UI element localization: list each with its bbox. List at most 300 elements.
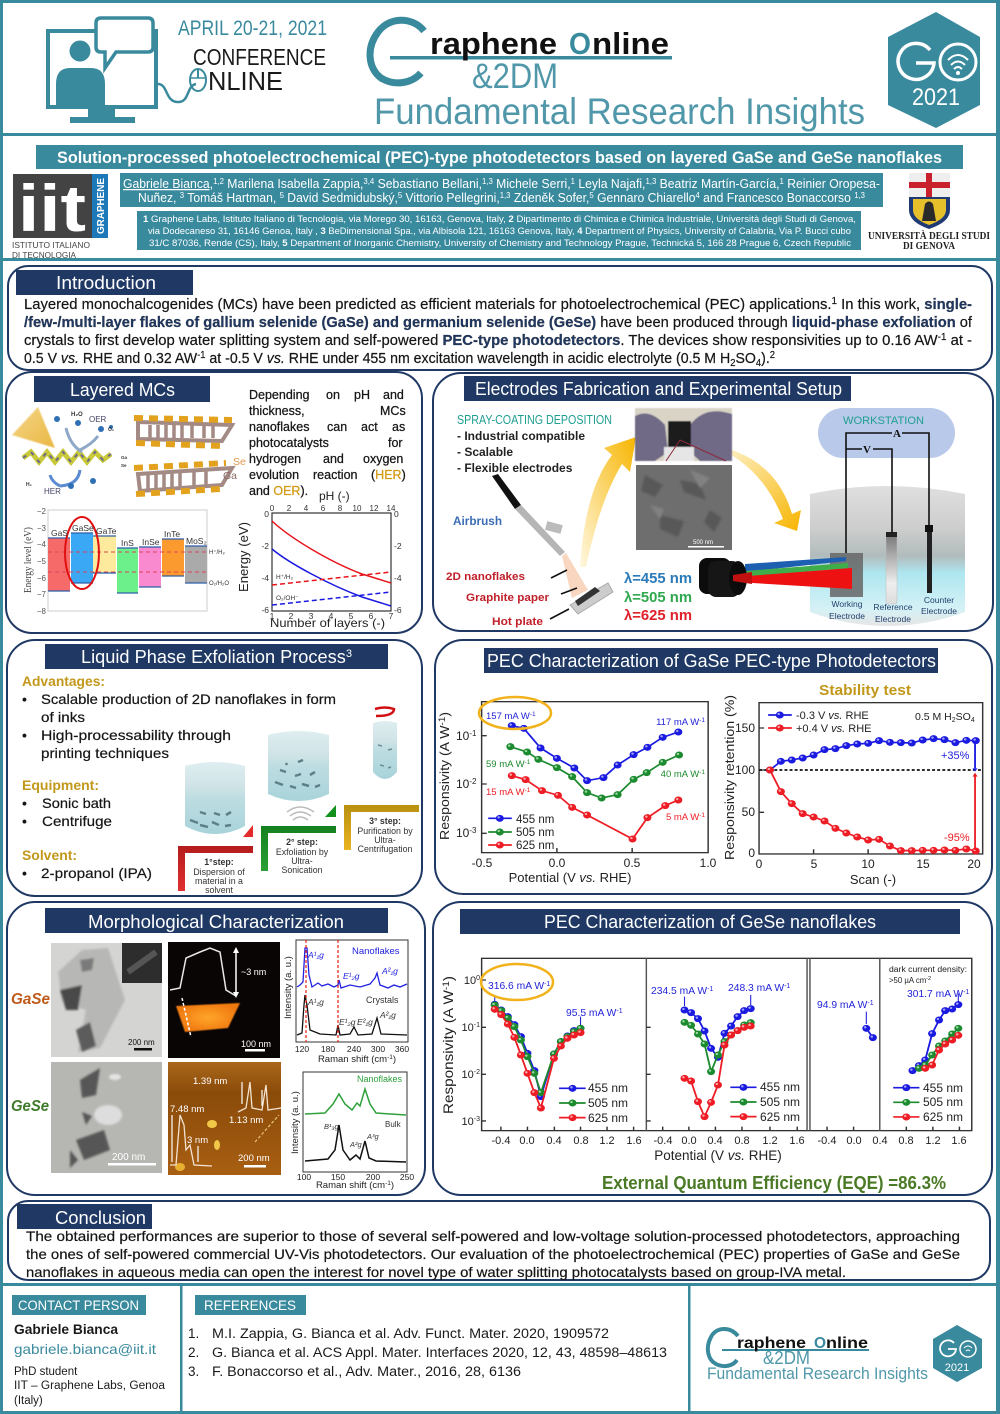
illustration: vial step 3 [373,708,397,779]
image: AFM GaSe: ~3 nm [241,967,266,977]
image: AFM GeSe: 1.39 nm [193,1076,227,1087]
chart: GeSe responsivity: 455 nm [760,1080,800,1094]
references block: G. Bianca et al. ACS Appl. Mater. Interfaces 2020, 12, 43, 48598–48613 [212,1345,667,1360]
chart: GeSe responsivity: Potential (V vs. RHE) [654,1148,782,1163]
photo: SEM image [636,465,732,550]
chart: stability test: 150 [735,721,755,735]
chart: GaSe responsivity: 59 mA W [486,759,525,770]
chart: GeSe responsivity: 625 nm [588,1111,628,1125]
chart: Raman GaSe: E¹₂g [343,971,360,981]
panel: conclusion [8,1201,990,1280]
label: GaSe: GaSe [11,991,50,1008]
chart: energy versus layers: 7 [389,611,394,621]
chart: GaSe responsivity: 505 nm [516,827,554,839]
chart: Raman GaSe: Nanoflakes [352,946,400,957]
chart: energy levels bands: Energy level (eV) [23,527,34,593]
text: introduction body: ). [761,350,770,367]
chart: GeSe responsivity: ) [441,976,456,981]
chart: energy versus layers: 4 [329,611,334,621]
diagram: electrochemical cell [810,486,965,626]
chart: energy versus layers: 2 [289,611,294,621]
diagram: electrochemical cell: Reference [873,602,913,612]
chart: energy levels bands: −2 [37,507,47,516]
image: AFM GaSe: 100 nm [241,1039,271,1049]
chart: GeSe responsivity: 1.2 [925,1135,941,1147]
chart: stability test: 100 [735,763,755,777]
chart: Raman GaSe: ) [393,1054,396,1065]
photo: SEM image: 500 nm [693,540,713,546]
heading: GeSe characterization: PEC Characterization of GeSe nanoflakes [544,912,876,932]
diagram: electrochemical cell: Working [831,599,863,609]
chart: Raman GaSe: A¹₁g [307,950,324,960]
footer logo [707,1329,928,1383]
chart: GeSe responsivity: 316.6 mA W [488,981,544,992]
chart: GeSe responsivity: 625 nm [760,1110,800,1124]
icon: airbrush and substrate [453,474,613,614]
chart: GeSe responsivity: 0.0 [519,1135,535,1147]
chart: Raman GeSe [290,1072,414,1191]
chart: Raman GaSe: Raman shift (cm [318,1054,387,1065]
chart: GeSe responsivity: -0.4 [654,1135,672,1147]
text: advantages: of inks [41,709,85,725]
panel: liquid phase exfoliation [7,640,422,896]
references block: 2. [188,1345,199,1360]
authors: 3 [180,191,185,200]
chart: Raman GaSe: Intensity (a. u.) [283,956,294,1019]
chart: energy versus layers: 0 [264,509,269,519]
text: advantages: Scalable production of 2D nanoflakes in form [41,691,336,707]
step 1: solvent [205,885,233,895]
authors: Michele Serri, [493,177,571,191]
text: solvent: 2-propanol (IPA) [41,865,152,881]
chart: GeSe responsivity: -1 [963,989,969,996]
text: introduction body: SO [735,350,756,367]
text: conclusion body: the ones of self-powered commercial UV-Vis photodetectors. Our evaluation of the photoelectrochemical (PEC) properties of GaSe and GeSe [26,1246,960,1262]
illustration: water splitting photocatalysis: H₂O [71,412,83,418]
authors: 1 [780,177,784,186]
step 2: Ultra- [291,856,313,866]
chart: GaSe responsivity: -1 [699,769,705,776]
chart: energy versus layers: 5 [349,611,354,621]
footer logo: Fundamental Research Insights [707,1364,928,1383]
text: advantages: High-processability through [41,727,231,743]
chart: GeSe responsivity: -1 [441,981,451,990]
chart: GaSe responsivity: 157 mA W [486,711,530,722]
Graphene Online logo: nline [592,26,669,61]
chart: GeSe responsivity: 95.5 mA W [566,1008,616,1019]
chart: GeSe responsivity: 10 [462,1116,474,1128]
chart: stability test: Scan (-) [850,872,896,887]
panel: morphological characterization [7,902,425,1195]
chart: energy versus layers: 10 [353,504,362,513]
chart: GaSe responsivity: 117 mA W [656,717,699,728]
step 1: 1°step: [204,857,234,867]
conference online label: CONFERENCE [193,44,326,70]
authors: 5 [280,191,284,200]
text: introduction body: single- [924,296,972,313]
text: MCs description: and OER). [249,484,308,498]
title bar: Solution-processed photoelectrochemical (PEC)-type photodetectors based on layered GaSe and GeSe nanoflakes [57,148,942,167]
chart: GeSe responsivity: 10 [464,975,476,987]
text: equipment: • [22,813,27,829]
heading: LPE [45,644,388,669]
references block: F. Bonaccorso et al., Adv. Mater., 2016, 28, 6136 [212,1364,521,1379]
text: introduction body: at -0.5 V [205,350,267,367]
authors: Sebastiano Bellani, [374,177,482,191]
chart: GaSe responsivity: -1 [530,711,536,718]
chart: Raman GaSe: 300 [371,1044,385,1054]
contact person block: IIT – Graphene Labs, Genoa [14,1380,166,1392]
icon: light source and beams [699,557,852,597]
authors: 1,2 [213,177,224,186]
chart: GeSe responsivity: -1 [616,1008,623,1015]
chart: energy levels bands: −3 [37,524,47,533]
chart: GaSe responsivity: 0.0 [549,856,566,870]
text: MCs description: Depending [249,388,310,402]
chart: GeSe responsivity: >50 µA cm [889,976,926,985]
chart: stability test: 5 [811,857,818,871]
authors: Gennaro Chiarello [594,191,696,205]
references block: M.I. Zappia, G. Bianca et al. Adv. Funct. Mater. 2020, 1909572 [212,1326,609,1341]
text: conclusion body: nanoflakes in aqueous media can open the interest for novel type of water splitting photocatalysts based on group-IVA metal. [26,1264,846,1280]
chart: GeSe responsivity: Responsivity (A W [441,1004,456,1114]
chart: GeSe responsivity: 1.6 [626,1135,642,1147]
heading: stability test: Stability test [819,682,911,699]
labels: spray components: Graphite paper [466,592,550,604]
chart: GeSe responsivity: 505 nm [760,1095,800,1109]
text: equipment: Centrifuge [42,813,112,829]
chart: GaSe responsivity: -1 [525,759,531,766]
arrow: electrode to cell [708,444,801,531]
references block [188,1295,667,1379]
authors: Nuñez, [138,191,178,205]
chart: GaSe responsivity: 625 nm [516,840,554,852]
chart: Raman GaSe: 240 [347,1044,361,1054]
chart: energy versus layers: 0 [394,509,399,519]
chart: energy versus layers: Number of layers (-) [270,616,385,630]
authors: Beatriz Martín-García, [656,177,780,191]
chart: GaSe responsivity: 10 [456,826,469,840]
chart: energy levels bands: GaS [51,528,68,538]
text: introduction body: In this work, [837,296,924,313]
diagram: workstation and wires: WORKSTATION [843,415,924,427]
chart: stability test: -95% [944,832,970,844]
icon: GO 2021 hexagon badge [888,12,980,128]
text: MCs description: reaction [313,468,358,482]
illustration: GaSe crystal structure [134,418,246,494]
panel: PEC characterization GeSe [433,902,992,1195]
logo: IIT Graphene [12,171,108,260]
authors [120,173,883,207]
chart: GeSe responsivity: 0.8 [898,1135,914,1147]
labels: wavelengths: λ=505 nm [624,589,692,606]
logo: IIT Graphene: GRAPHENE [95,178,107,234]
text: introduction body: 4 [756,358,762,369]
chart: GaSe responsivity: -0.5 [472,856,493,870]
text: MCs description: on [326,388,340,402]
photo: flexible electrode [635,408,732,461]
footer logo: nline [826,1335,868,1352]
Graphene Online logo: raphene [430,26,557,61]
authors: 4 [696,191,700,200]
chart: GeSe responsivity: -1 [544,981,550,988]
chart: GeSe responsivity: 0.4 [707,1135,723,1147]
chart: GaSe responsivity: -1 [699,812,705,819]
arrow: spray to electrode [580,437,636,567]
chart: energy levels bands [23,507,229,616]
text: MCs description: MCs [380,404,406,418]
footer GO hexagon: 2021 [945,1362,969,1374]
text: equipment: • [22,795,27,811]
chart: energy versus layers: 6 [369,611,374,621]
contact person block: CONTACT PERSON [18,1298,139,1313]
image: TEM GaSe [51,943,162,1057]
heading: introduction: Introduction [56,273,156,293]
image: TEM GeSe: 200 nm [112,1152,145,1163]
chart: GeSe responsivity: -1 [474,1022,480,1029]
chart: GeSe responsivity: 455 nm [588,1081,628,1095]
text: conclusion body: The obtained performances are superior to those of several self-powered and low-voltage solution-processed photodetectors, approaching [26,1228,960,1244]
heading: introduction [16,270,193,295]
authors: 1,3 [500,191,511,200]
Graphene Online logo [370,20,865,132]
chart: stability test: 10 [861,857,875,871]
chart: Raman GaSe: E²₁g [357,1017,373,1027]
chart: Raman GeSe: Nanoflakes [357,1074,403,1084]
chart: GaSe responsivity: -1 [699,717,705,724]
text: MCs description: oxygen [363,452,403,466]
text: solvent: Solvent: [22,847,77,863]
chart: GaSe responsivity: 455 nm [516,814,554,826]
text: MCs description: as [392,420,405,434]
chart: GaSe responsivity: 0.5 [624,856,641,870]
logo: University of Genova [868,173,990,252]
chart: Raman GeSe: A³g [366,1132,380,1141]
chart: Raman GaSe: -1 [387,1054,393,1061]
chart: stability test: +0.4 V vs. RHE [796,723,872,735]
icon: online conference monitor with person [48,18,196,123]
chart: energy levels bands: H⁺/H₂ [209,549,226,556]
chart: GeSe responsivity [441,958,972,1163]
contact person block: Gabriele Bianca [14,1321,118,1337]
chart: GaSe responsivity: Responsivity (A W [437,735,452,840]
chart: GeSe responsivity: 0.8 [734,1135,750,1147]
chart: energy versus layers: 0 [270,504,275,513]
chart: energy versus layers [237,489,402,630]
illustration: water splitting photocatalysis: Se [121,463,127,468]
chart: energy versus layers: pH (-) [319,489,350,503]
chart: GeSe responsivity: -0.4 [492,1135,510,1147]
chart: GeSe responsivity: 0.0 [681,1135,697,1147]
chart: stability test: 50 [742,805,755,819]
chart: energy levels bands: MoS₂ [186,536,207,546]
authors: 5 [398,191,403,200]
chart: GeSe responsivity: -1 [867,1000,874,1007]
chart: energy versus layers: 3 [309,611,314,621]
chart: energy versus layers: Energy (eV) [237,522,251,592]
step 2: 2° step: [286,837,318,847]
chart: GeSe responsivity: -0.4 [818,1135,836,1147]
Graphene Online logo: O [569,26,591,61]
references block: REFERENCES [204,1298,296,1313]
affiliations: 31/C 87036, Rende (CS), Italy, 5 Department of Inorganic Chemistry, University of Chemistry and Technology Prague, Technická 5, 166 28 Prague 6, Czech Republic [149,238,851,249]
image: AFM GeSe: 7.48 nm [170,1104,204,1115]
chart: Raman GeSe: 100 [297,1172,311,1182]
text: MCs description: and [323,452,344,466]
heading: conclusion [17,1204,152,1229]
chart: GeSe responsivity: 10 [462,1022,474,1034]
chart: GaSe responsivity: 5 mA W [666,812,699,823]
step 3: 3° step: [369,816,401,826]
chart: GaSe responsivity: -1 [469,729,477,738]
text: introduction body [24,296,973,369]
illustration: GaSe crystal structure: Se [233,456,246,468]
illustration: water splitting photocatalysis: OER [89,415,107,424]
chart: Raman GeSe: Intensity (a. u.) [290,1091,301,1154]
text: spray coating: - Industrial compatible [457,429,585,443]
text: MCs description: hydrogen [249,452,301,466]
chart: GeSe responsivity: 1.6 [951,1135,967,1147]
chart: GaSe responsivity: Potential (V vs. RHE) [509,870,631,885]
icon: airbrush and substrate: Airbrush [453,516,502,528]
heading: morphology: Morphological Characterization [88,912,344,932]
chart: GeSe responsivity: -1 [784,983,790,990]
heading: layered MCs [34,376,210,402]
chart: GaSe responsivity: -1 [437,717,447,725]
chart: GeSe responsivity: -3 [474,1116,480,1123]
step 2: Sonication [281,865,323,875]
text: MCs description: nanoflakes [249,420,309,434]
authors: 5 [589,191,594,200]
heading: GeSe characterization [460,909,960,934]
text: MCs description: pH [354,388,370,402]
heading: conclusion: Conclusion [55,1208,146,1228]
chart: stability test: +35% [941,750,970,762]
chart: stability test [722,695,983,887]
chart: GeSe responsivity: -2 [926,976,931,982]
step 3: Purification by [357,826,413,836]
chart: stability test: 4 [971,717,975,724]
chart: GaSe responsivity: 10 [456,729,469,743]
chart: energy versus layers: -2 [261,541,269,551]
chart: energy levels bands: −8 [37,607,47,616]
chart: Raman GaSe: E¹₂g [339,1017,356,1027]
authors: 1,3 [854,191,866,200]
panel: electrodes fabrication and setup [433,373,993,631]
text: introduction body: 2 [730,358,736,369]
text: introduction body: at - [946,332,972,349]
conference date: APRIL 20-21, 2021 [178,17,327,40]
text: solvent [22,847,152,881]
chart: GeSe responsivity: 301.7 mA W [907,989,963,1000]
diagram: electrochemical cell: Electrode [875,614,911,624]
text: introduction body: 0.5 V vs. RHE and 0.32 AW [24,350,204,367]
chart: energy versus layers: 6 [321,504,326,513]
text: MCs description: thickness, [249,404,305,418]
illustration: water splitting photocatalysis: H₂ [26,482,32,488]
image: AFM GeSe: 1.13 nm [229,1115,263,1126]
text: introduction body: 2 [770,350,775,361]
chart: Raman GaSe: 180 [321,1044,335,1054]
chart: GaSe responsivity: 40 mA W [661,769,699,780]
text: introduction body: Layered monochalcogenides (MCs) have been predicted as efficient materials for photoelectrochemical (PEC) applications. [24,296,842,313]
text: MCs description: and [383,388,404,402]
chart: GeSe responsivity: 0 [476,975,480,982]
authors: David Sedmidubský, [284,191,398,205]
footer logo: raphene [737,1335,806,1352]
chart: Raman GaSe [283,940,409,1065]
chart: stability test: -0.3 V vs. RHE [796,710,869,722]
chart: stability test: 0 [756,857,763,871]
image: AFM GaSe [168,942,280,1058]
chart: GeSe responsivity: 248.3 mA W [728,983,784,994]
heading: LPE: 3 [346,648,352,660]
text: introduction body: vs. RHE under 455 nm excitation wavelength in acidic electrolyte (0.5 M H [267,350,758,367]
references block: 1. [188,1326,199,1341]
step 3: Ultra- [374,835,396,845]
diagram: electrochemical cell: Electrode [921,606,957,616]
chart: energy levels bands: −4 [37,540,47,549]
panel: introduction [8,266,992,370]
illustration: beaker step 1 [185,762,245,834]
text: MCs description: evolution [249,468,299,482]
authors: Leyla Najafi, [575,177,645,191]
icon: GO 2021 hexagon badge: 2021 [912,84,960,111]
text: MCs description [249,388,406,498]
authors: 1,3 [482,177,493,186]
chart: GeSe responsivity: 0.8 [573,1135,589,1147]
chart: GeSe responsivity: dark current density: [889,965,967,974]
chart: Raman GeSe: -1 [385,1180,391,1187]
step 2: Exfoliation by [276,847,329,857]
image: TEM GaSe: 200 nm [128,1038,155,1047]
labels: wavelengths: λ=625 nm [624,607,692,624]
chart: stability test: 2 [952,717,956,724]
chart: Raman GaSe: A²₁g [381,966,398,976]
text: conclusion body [26,1228,960,1280]
labels: wavelengths [624,570,692,624]
text: advantages: Advantages: [22,673,105,689]
panel: layered MCs [6,372,422,633]
chart: GaSe responsivity: -1 [525,787,531,794]
illustration: water splitting photocatalysis: HER [44,487,61,496]
chart: Raman GeSe: ) [391,1180,394,1191]
text: MCs description: ( [371,468,376,482]
text: advantages: • [22,691,27,707]
conference online label [190,44,326,96]
chart: Raman GaSe: 120 [295,1044,309,1054]
authors: Marilena Isabella Zappia, [224,177,363,191]
logo: IIT Graphene: iit [18,171,86,245]
text: MCs description: act [361,420,378,434]
chart: stability test: 15 [916,857,930,871]
chart: GeSe responsivity: 0.4 [872,1135,888,1147]
authors: 1,3 [645,177,657,186]
chart: GeSe responsivity: -1 [707,986,713,993]
chart: GaSe responsivity [437,697,717,885]
text: external quantum efficiency: External Quantum Efficiency (EQE) =86.3% [602,1173,946,1193]
chart: GaSe responsivity: -3 [469,826,477,835]
text: introduction body: 1 [832,296,837,307]
references block: 3. [188,1364,199,1379]
chart: energy levels bands: GaSe [72,523,94,533]
contact person block: PhD student [14,1366,78,1378]
chart: GeSe responsivity: 10 [462,1069,474,1081]
heading: morphology [45,908,388,933]
image: TEM GeSe [51,1062,162,1173]
text: spray coating: - Scalable [457,445,513,459]
icon: sonication waves [287,807,314,820]
